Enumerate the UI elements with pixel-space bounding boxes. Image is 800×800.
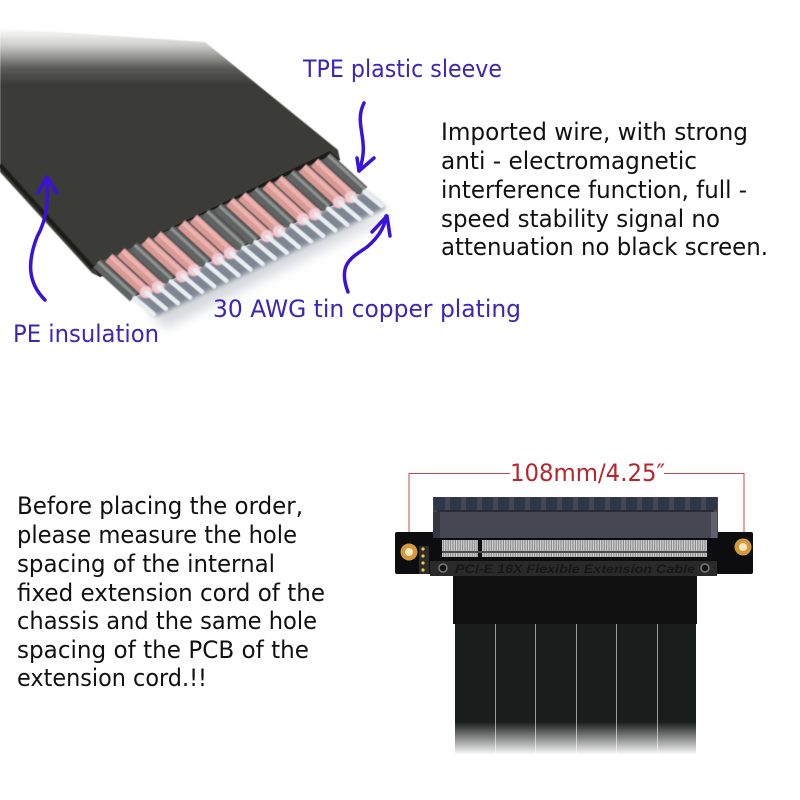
arrow: TPE plastic sleeve xyxy=(357,103,374,171)
grey sleeve highlights xyxy=(98,155,365,296)
slot side latch right xyxy=(711,512,717,538)
cable jacket xyxy=(0,28,340,277)
pink sleeves xyxy=(109,162,352,292)
text block: measuring advice: fixed extension cord of the xyxy=(17,579,325,607)
slot teeth xyxy=(434,497,717,510)
label: 30 AWG tin copper plating: 30 AWG tin copper plating xyxy=(213,295,521,323)
grey sleeves xyxy=(97,157,364,297)
strain relief block xyxy=(453,574,697,624)
mounting hole left centre xyxy=(405,548,413,556)
jacket dark mouth xyxy=(92,151,340,277)
PCB board xyxy=(395,532,753,574)
mounting hole right centre xyxy=(739,543,747,551)
wire soft shadow xyxy=(150,214,395,328)
arrow: PE insulation xyxy=(31,177,57,300)
text block: wire description: attenuation no black screen. xyxy=(441,233,768,261)
panel: PCI-E riser connector xyxy=(395,459,753,755)
text on PCB: PCI-E 16X Flexible Extension Cable xyxy=(455,562,695,576)
text block: measuring advice xyxy=(17,492,325,692)
dimension line right xyxy=(664,474,744,540)
text block: wire description: Imported wire, with strong xyxy=(441,118,748,146)
dimension label: 108mm/4.25″ xyxy=(510,459,665,487)
pink sleeve highlights xyxy=(110,161,353,290)
pink insulation rings xyxy=(140,191,357,298)
text block: wire description: anti - electromagnetic xyxy=(441,147,697,175)
slot side latch left xyxy=(433,512,440,538)
text block: wire description xyxy=(441,118,768,261)
text block: measuring advice: spacing of the internal xyxy=(17,550,275,578)
finger gap xyxy=(442,551,707,553)
screw left xyxy=(439,564,447,572)
gold fingers short xyxy=(442,540,478,557)
text block: measuring advice: please measure the hole xyxy=(17,521,297,549)
text block: measuring advice: extension cord.!! xyxy=(17,664,207,692)
dimension line left xyxy=(409,474,510,545)
wire strip base xyxy=(97,157,364,297)
slot connector shadow xyxy=(437,510,714,512)
slot connector body xyxy=(433,497,718,538)
label: PE insulation: PE insulation xyxy=(13,320,159,348)
ribbon dividers xyxy=(495,624,658,754)
panel: flat cable cross-section xyxy=(0,28,395,328)
text block: measuring advice: Before placing the order, xyxy=(17,492,303,520)
bare conductors xyxy=(135,192,382,314)
text block: wire description: speed stability signal no xyxy=(441,205,720,233)
screw right xyxy=(701,564,709,572)
conductor shadow band xyxy=(134,191,386,316)
header pins xyxy=(419,546,429,574)
label: TPE plastic sleeve: TPE plastic sleeve xyxy=(302,55,502,83)
ribbon fade xyxy=(450,722,700,755)
jacket lower edge xyxy=(0,165,93,268)
ribbon cable xyxy=(455,624,696,754)
text block: measuring advice: chassis and the same hole xyxy=(17,607,317,635)
mounting hole left xyxy=(400,544,418,560)
mounting hole right xyxy=(734,538,752,556)
text block: wire description: interference function, full - xyxy=(441,176,747,204)
text block: measuring advice: spacing of the PCB of the xyxy=(17,636,309,664)
arrow: 30 AWG tin copper plating xyxy=(344,216,390,292)
label strip xyxy=(430,561,717,576)
gold fingers long xyxy=(482,540,707,557)
wire group xyxy=(97,155,382,314)
